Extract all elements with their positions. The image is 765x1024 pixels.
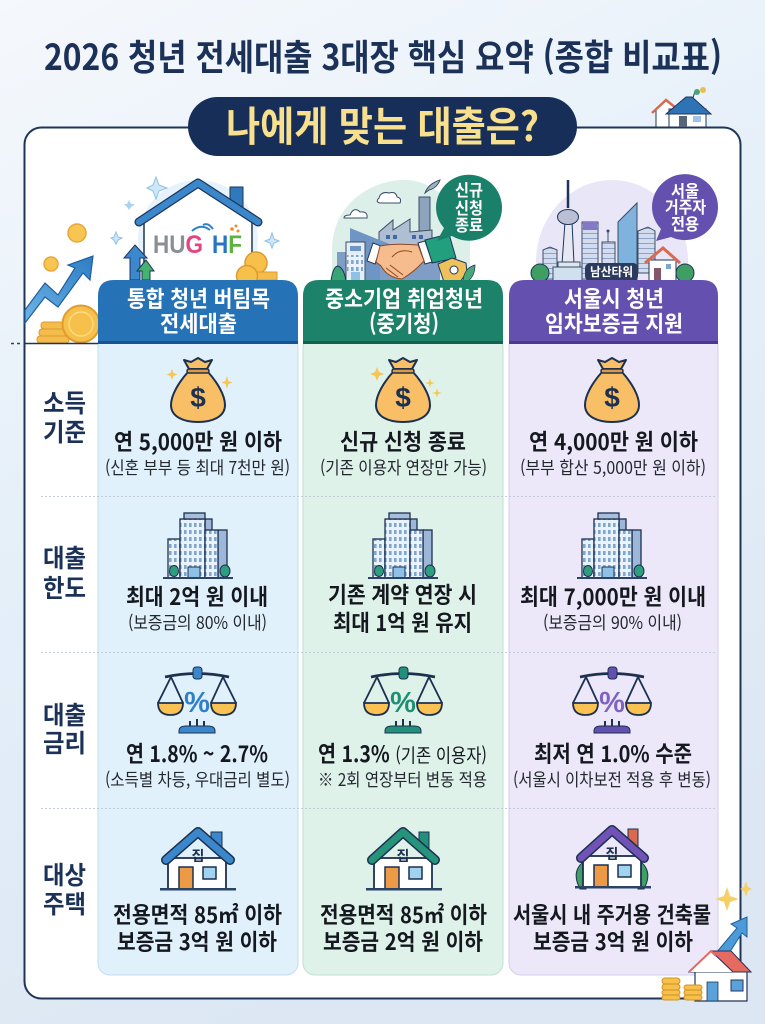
- rate text: ※ 2회 연장부터 변동 적용: [318, 767, 487, 792]
- income text: (부부 합산 5,000만 원 이하): [520, 455, 706, 480]
- income text: 신규 신청 종료: [340, 425, 466, 457]
- housing text: 보증금 2억 원 이하: [323, 925, 483, 957]
- house icon: 집: [606, 844, 618, 864]
- rate icon: [364, 667, 442, 733]
- limit text: [328, 578, 477, 638]
- rate icon: [158, 667, 236, 733]
- column header: [98, 280, 298, 344]
- row label: rate: 금리: [43, 724, 86, 760]
- row label: limit: [43, 539, 86, 605]
- rate text: (서울시 이차보전 적용 후 변동): [513, 767, 711, 792]
- panel: SME column: [303, 280, 503, 975]
- housing text: 전용면적 85㎡ 이하: [320, 898, 487, 930]
- illustration: Seoul skyline: [531, 180, 694, 344]
- income icon: $: [395, 382, 411, 413]
- row label: income: [43, 384, 86, 449]
- illustration: HUG HF house: [111, 177, 279, 300]
- rate icon: %: [184, 687, 210, 719]
- column header: 중소기업 취업청년: [325, 282, 483, 314]
- main card: [24, 128, 740, 998]
- housing text: [320, 898, 487, 957]
- column header: 서울시 청년: [564, 282, 664, 314]
- badge: Seoul residents only: 전용: [671, 211, 699, 235]
- row label: income: 소득: [43, 384, 86, 420]
- income text: 연 4,000만 원 이하: [529, 425, 698, 457]
- row label: income: 기준: [43, 413, 86, 449]
- income text: [320, 425, 487, 480]
- badge: Seoul residents only: 거주자: [665, 194, 706, 218]
- row label: housing: [43, 856, 86, 921]
- house icon: [575, 829, 651, 889]
- column header: 전세대출: [160, 307, 237, 339]
- row label: limit: 한도: [43, 569, 86, 605]
- badge: Seoul residents only: [652, 174, 718, 241]
- illustration: HUG HF house: HF: [212, 231, 242, 259]
- row label: limit: 대출: [43, 539, 86, 575]
- housing text: 보증금 3억 원 이하: [533, 925, 693, 957]
- limit icon: [577, 513, 647, 579]
- housing text: 보증금 3억 원 이하: [117, 925, 277, 957]
- income text: [105, 425, 290, 480]
- rate text: 최저 연 1.0% 수준: [534, 737, 692, 769]
- panel: Seoul column: [509, 280, 718, 975]
- housing text: [513, 898, 711, 957]
- housing text: 전용면적 85㎡ 이하: [113, 898, 282, 930]
- limit text: 최대 2억 원 이내: [126, 580, 268, 612]
- income icon: [370, 358, 442, 422]
- house icon: 집: [397, 846, 409, 866]
- column header: [509, 280, 718, 344]
- housing text: [113, 898, 282, 957]
- rate text: (소득별 차등, 우대금리 별도): [105, 767, 290, 792]
- rate icon: [573, 667, 651, 733]
- column header: 통합 청년 버팀목: [127, 282, 270, 314]
- income icon: $: [190, 382, 206, 413]
- row label: housing: 주택: [43, 885, 86, 921]
- income text: [520, 425, 706, 480]
- limit text: 최대 1억 원 유지: [333, 606, 472, 638]
- income icon: [585, 358, 639, 422]
- illustration: factory and handshake: [331, 180, 475, 282]
- income icon: $: [604, 382, 620, 413]
- column header: (중기청): [369, 307, 439, 339]
- panel: HUG column: [98, 280, 298, 975]
- limit text: 최대 7,000만 원 이내: [520, 580, 706, 612]
- row line: [24, 342, 98, 344]
- income text: (기존 이용자 연장만 가능): [320, 455, 487, 480]
- rate text: [105, 737, 290, 792]
- income text: 연 5,000만 원 이하: [114, 425, 282, 457]
- rate text: [318, 737, 487, 792]
- house icon: 집: [192, 846, 204, 866]
- column header: [303, 280, 503, 344]
- badge: new applications closed: 신청: [455, 195, 483, 219]
- illustration: HUG HF house: HUG: [153, 231, 203, 259]
- icon: rooftop house: [652, 87, 711, 127]
- limit icon: [368, 513, 438, 579]
- housing text: 서울시 내 주거용 건축물: [513, 898, 711, 930]
- limit text: (보증금의 80% 이내): [128, 610, 267, 635]
- row label: rate: [43, 696, 86, 760]
- rate text: 연 1.3% (기존 이용자): [318, 737, 487, 769]
- tower label: 남산타워: [590, 263, 633, 280]
- income text: (신혼 부부 등 최대 7천만 원): [105, 455, 290, 480]
- rate icon: %: [390, 687, 416, 719]
- illustration: growth arrow and coins: [25, 224, 100, 343]
- badge: new applications closed: 종료: [455, 212, 483, 236]
- limit text: (보증금의 90% 이내): [543, 610, 682, 635]
- house icon: [160, 832, 236, 890]
- row label: housing: 대상: [43, 856, 86, 892]
- limit text: [520, 580, 706, 635]
- badge: new applications closed: [436, 175, 502, 241]
- limit text: 기존 계약 연장 시: [328, 578, 477, 610]
- rate text: [513, 737, 711, 792]
- rate icon: %: [599, 687, 625, 719]
- pill heading: 나에게 맞는 대출은?: [226, 93, 539, 153]
- illustration: corner house with arrow and coins: [662, 881, 752, 1001]
- house icon: [366, 832, 442, 890]
- income icon: [166, 358, 232, 422]
- column header: 임차보증금 지원: [545, 307, 683, 339]
- row label: rate: 대출: [43, 696, 86, 732]
- limit icon: [163, 513, 233, 579]
- badge: new applications closed: 신규: [455, 177, 483, 201]
- rate text: 연 1.8% ~ 2.7%: [126, 737, 268, 769]
- badge: Seoul residents only: 서울: [671, 178, 699, 202]
- limit text: [126, 580, 268, 635]
